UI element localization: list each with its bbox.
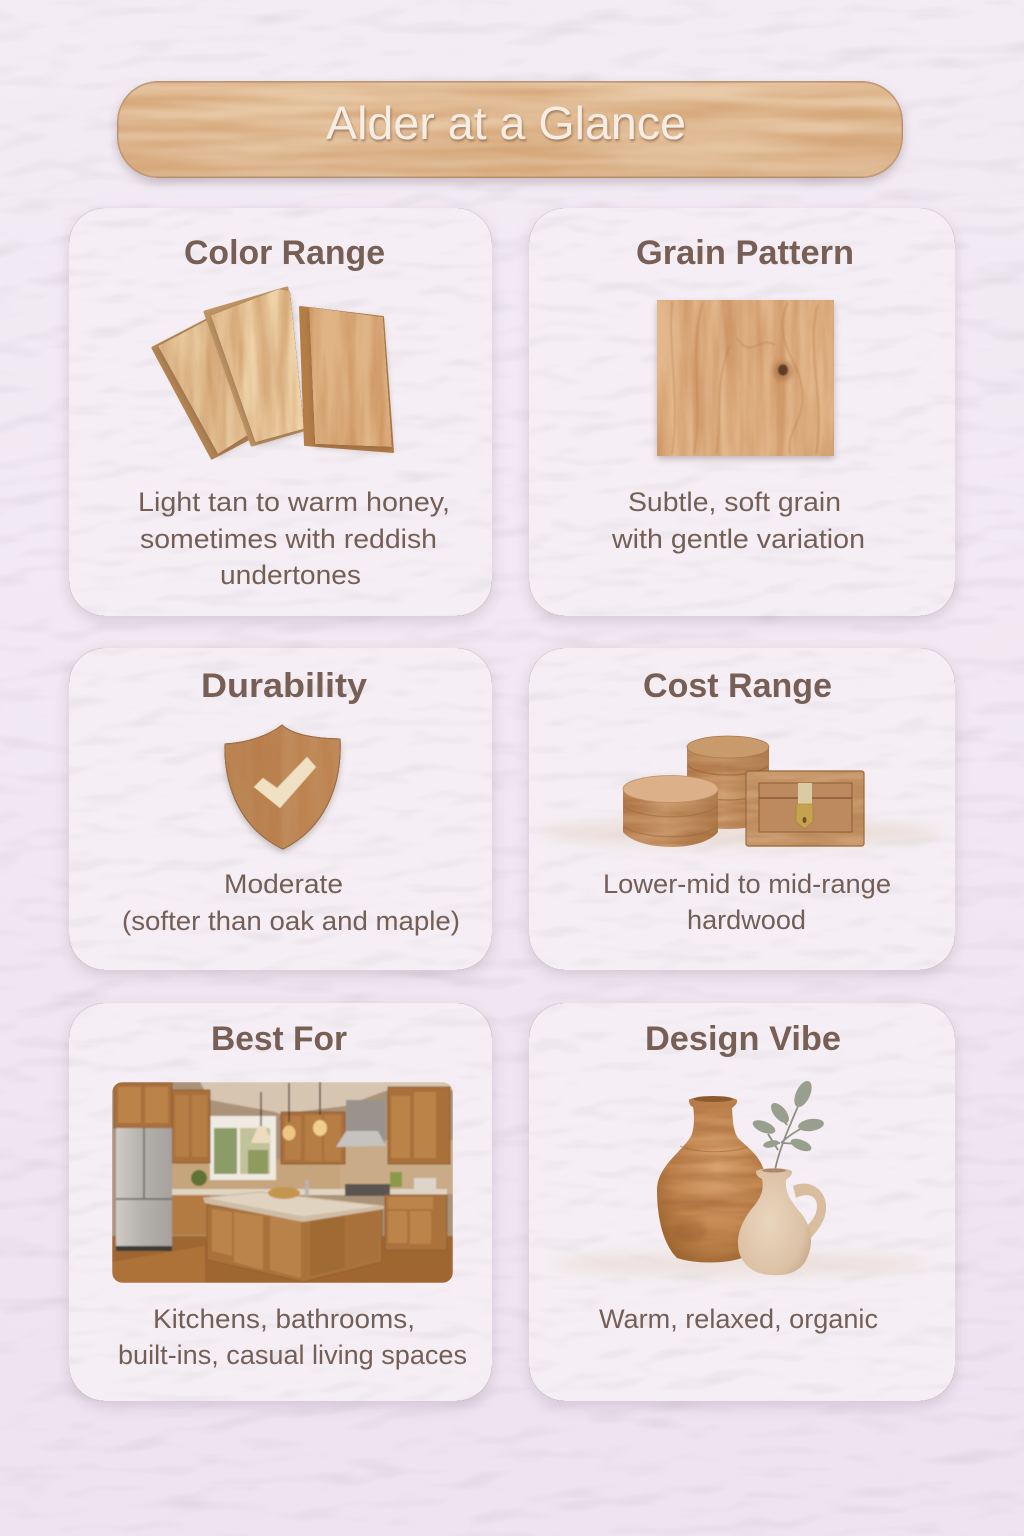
description: grain pattern: with gentle variation xyxy=(611,524,865,554)
description: best for: Kitchens, bathrooms, xyxy=(153,1304,415,1334)
range hood xyxy=(346,1100,386,1144)
heading: design vibe: Design Vibe xyxy=(645,1020,841,1058)
icon: ceramic jug xyxy=(738,1168,826,1275)
description: grain pattern xyxy=(611,487,865,554)
icon: check mark xyxy=(254,757,316,808)
description: color range: undertones xyxy=(220,560,361,590)
description: cost range xyxy=(603,869,891,935)
description: durability: Moderate xyxy=(224,869,343,899)
upper cabinets xyxy=(114,1083,172,1128)
plant and kettle xyxy=(191,1170,207,1186)
description: best for xyxy=(118,1304,467,1370)
illustration: kitchen xyxy=(112,1082,453,1283)
icon: wooden shield with check xyxy=(225,725,340,849)
fridge xyxy=(116,1128,172,1250)
heading: color range: Color Range xyxy=(184,234,385,272)
icon: wooden boxes and chest xyxy=(540,736,940,847)
island body xyxy=(207,1205,382,1282)
icon: back stacked round box xyxy=(687,736,769,829)
panel: grain pattern xyxy=(529,208,955,616)
panel: durability xyxy=(69,648,492,970)
description: cost range: hardwood xyxy=(687,905,806,935)
description: color range: sometimes with reddish xyxy=(140,524,437,554)
description: grain pattern: Subtle, soft grain xyxy=(628,487,841,517)
bowl and faucet xyxy=(268,1187,300,1199)
heading: durability: Durability xyxy=(201,667,367,705)
description: cost range: Lower-mid to mid-range xyxy=(603,869,891,899)
description: design vibe: Warm, relaxed, organic xyxy=(599,1304,878,1334)
heading: cost range: Cost Range xyxy=(643,667,832,705)
panel: design vibe xyxy=(529,1003,955,1401)
description: best for: built-ins, casual living spaces xyxy=(118,1340,467,1370)
window xyxy=(210,1116,276,1180)
description: color range xyxy=(138,487,450,590)
title: Alder at a Glance xyxy=(326,97,686,149)
icon: plant sprig xyxy=(751,1078,825,1170)
back counter xyxy=(172,1189,447,1195)
right lower cabinets xyxy=(385,1195,447,1250)
description: durability: (softer than oak and maple) xyxy=(122,906,460,936)
description: durability xyxy=(122,869,460,936)
illustration: wooden vases with plant xyxy=(550,1078,930,1277)
pendant lights xyxy=(261,1082,320,1128)
icon: front round box xyxy=(623,776,718,847)
heading: grain pattern: Grain Pattern xyxy=(636,234,854,272)
icon: large wooden vase xyxy=(657,1096,766,1262)
panel: best for xyxy=(69,1003,492,1401)
description: color range: Light tan to warm honey, xyxy=(138,487,450,517)
island countertop xyxy=(203,1192,384,1217)
title banner: wood plank xyxy=(118,82,902,177)
icon: wooden chest with clasp xyxy=(746,771,864,846)
heading: best for: Best For xyxy=(211,1020,347,1058)
icon: wood grain square xyxy=(657,300,834,456)
icon: three wood boards xyxy=(153,288,393,458)
panel: color range xyxy=(69,208,492,616)
panel: cost range xyxy=(529,648,955,970)
